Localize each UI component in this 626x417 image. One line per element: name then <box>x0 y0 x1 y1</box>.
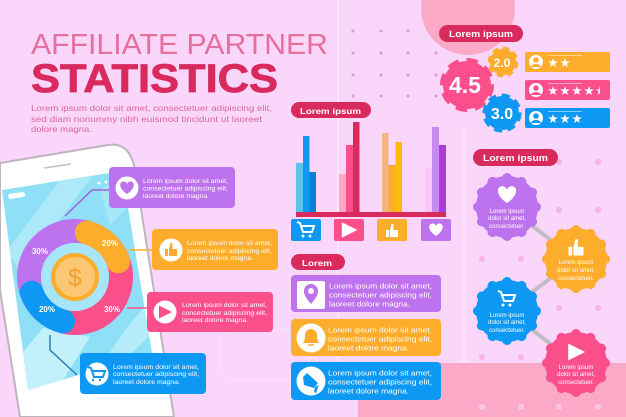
badge: cart: consectetuer. <box>489 328 525 334</box>
heading: process <box>473 149 558 166</box>
callout: pink: laoreet dolore magna. <box>182 317 248 324</box>
list item: location: Lorem ipsum dolor sit amet, <box>329 282 432 290</box>
badge: heart: Lorem ipsum <box>490 209 524 215</box>
callout: pink: consectetuer adipiscing elit, <box>182 310 267 317</box>
rating row: two stars <box>525 52 610 72</box>
icon: coin: $ <box>68 264 82 292</box>
donut chart: 30% <box>32 247 48 256</box>
callout: orange: Lorem ipsum dolor sit amet, <box>187 240 272 247</box>
badge: cart <box>476 280 538 342</box>
list item: megaphone: consectetuer adipiscing elit, <box>328 378 432 386</box>
title: STATISTICS <box>31 57 278 101</box>
intro text <box>31 103 272 134</box>
list item: location: consectetuer adipiscing elit, <box>329 290 432 300</box>
intro text: Lorem ipsum dolor sit amet, consectetuer adipiscing elit, <box>31 103 272 113</box>
badge: heart: dolor sit amet, <box>488 216 526 222</box>
gear: 2.0: 2.0 <box>494 56 511 70</box>
list item: location: laoreet dolore magna. <box>329 300 410 308</box>
connector lines <box>507 207 576 363</box>
icon tile: heart <box>421 219 451 241</box>
badge: heart <box>476 176 538 238</box>
gear: 4.5: 4.5 <box>449 72 481 98</box>
badge: play: Lorem ipsum <box>559 365 593 371</box>
intro text: sed diam nonummy nibh euismod tincidunt ut laoreet <box>31 114 263 124</box>
callout: blue: Lorem ipsum dolor sit amet, <box>113 364 199 371</box>
badge: play: dolor sit amet, <box>557 372 595 378</box>
badge: thumb: Lorem ipsum <box>559 260 593 266</box>
title <box>31 29 328 101</box>
badge: cart: Lorem ipsum <box>490 313 524 319</box>
badge: play <box>545 332 607 394</box>
heading: ratings <box>439 25 523 42</box>
list item: megaphone: Lorem ipsum dolor sit amet, <box>328 368 432 378</box>
rating row: three stars <box>525 108 610 128</box>
list item: bell: Lorem ipsum dolor sit amet, <box>328 326 432 334</box>
heading: lorem: Lorem <box>302 258 333 268</box>
connector lines <box>50 190 152 375</box>
list item: bell <box>291 319 441 356</box>
phone <box>0 145 174 417</box>
list item: megaphone: laoreet dolore magna. <box>328 386 409 396</box>
icon tile: play <box>334 219 364 241</box>
badge: cart: dolor sit amet, <box>488 320 526 326</box>
callout: pink <box>147 292 273 332</box>
callout: orange <box>152 229 278 270</box>
bar chart <box>296 122 446 217</box>
icon tile: thumb <box>377 219 407 241</box>
callout: purple: laoreet dolore magna. <box>143 193 209 200</box>
donut chart <box>29 231 121 323</box>
callout: blue: consectetuer adipiscing elit, <box>113 371 199 378</box>
donut chart: 30% <box>104 305 120 314</box>
icon tile: cart <box>291 219 321 241</box>
heading: process: Lorem ipsum <box>483 153 548 163</box>
heading: bar chart: Lorem ipsum <box>300 106 361 116</box>
callout: purple: consectetuer adipiscing elit, <box>143 186 228 192</box>
gear: 3.0 <box>484 95 520 131</box>
badge: thumb: dolor sit amet, <box>557 268 595 274</box>
donut chart: 20% <box>39 305 55 314</box>
callout: orange: laoreet dolore magna. <box>187 255 253 262</box>
heading: ratings: Lorem ipsum <box>449 29 513 39</box>
list item: megaphone <box>291 362 441 400</box>
callout: purple: Lorem ipsum dolor sit amet, <box>143 178 228 185</box>
list item: bell: consectetuer adipiscing elit, <box>328 334 432 344</box>
badge: play: consectetuer. <box>558 380 594 386</box>
background decor <box>219 0 626 417</box>
callout: pink: Lorem ipsum dolor sit amet, <box>182 302 267 309</box>
gear: 2.0 <box>489 48 517 76</box>
rating row: four and half stars <box>525 80 610 100</box>
donut chart: 20% <box>102 239 118 248</box>
heading: bar chart <box>291 102 371 118</box>
gear: 4.5 <box>442 60 492 110</box>
callout: blue: laoreet dolore magna. <box>113 379 180 386</box>
list item: location <box>291 275 441 312</box>
dot pattern <box>352 30 601 410</box>
gear: 3.0: 3.0 <box>491 106 513 123</box>
callout: purple <box>109 167 235 208</box>
callout: orange: consectetuer adipiscing elit, <box>187 248 272 255</box>
badge: thumb: consectetuer. <box>558 276 594 282</box>
intro text: dolore magna. <box>31 124 92 134</box>
title: AFFILIATE PARTNER <box>31 29 328 61</box>
badge: thumb <box>545 228 607 290</box>
list item: bell: laoreet dolore magna. <box>328 344 409 352</box>
heading: lorem <box>291 254 345 270</box>
badge: heart: consectetuer. <box>489 224 525 230</box>
callout: blue <box>80 353 206 394</box>
